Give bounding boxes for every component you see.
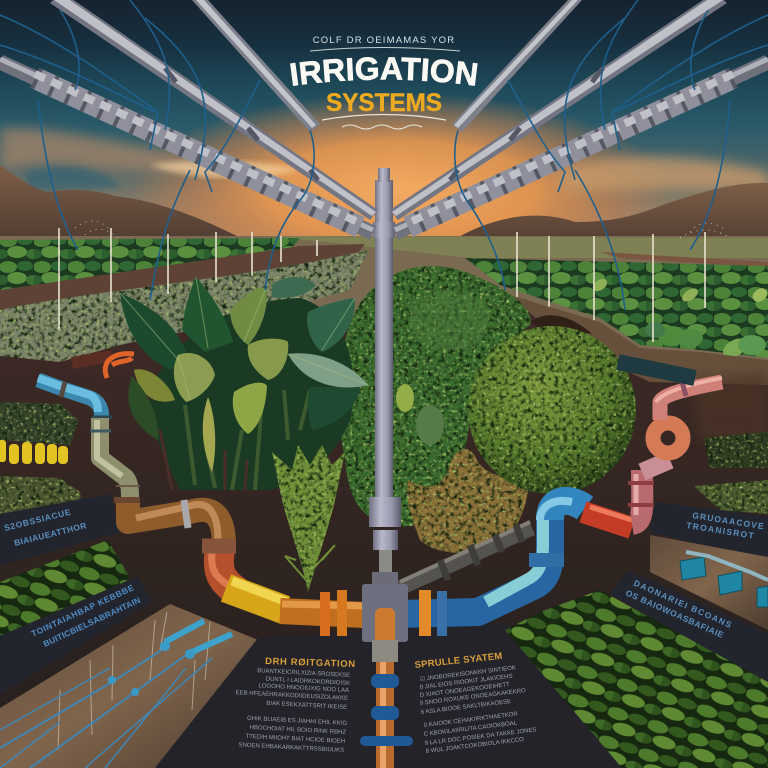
vertical outlet pipe [360, 608, 413, 768]
text block: sprinkler right: 9 SNOO ROXUKE ONOEAGKAKEKRO [420, 688, 526, 707]
title: arched irrigation path [284, 80, 484, 87]
text block: sprinkler right: 6 ASLA BIOOE SAKLTBIKAOESE [421, 699, 512, 716]
stems [185, 390, 310, 490]
panel: right bucket soil patch [650, 535, 768, 630]
mountains right [450, 183, 768, 250]
pipe: top right middle [390, 0, 727, 220]
text block: sprinkler right: 8 WUL JOAKTCOKOBIOLA IKKCCO [426, 737, 525, 755]
field posts [59, 228, 705, 342]
text block: sprinkler right: 8 JIAL EIOS RIOOKIT JLAKICEHS [420, 674, 513, 691]
text block: drip left: BIAK ESEKXATTSRIT IKEISE [266, 701, 347, 711]
title: underline swoosh [322, 114, 446, 120]
right low red shrub [407, 449, 529, 553]
blue hoses [0, 0, 768, 310]
central mixed bush behind pole [339, 266, 531, 526]
pipe: main left coiled [0, 59, 373, 233]
pipe: top right far [452, 0, 582, 132]
pipe: pink with ring [642, 378, 722, 472]
colored pipeline [38, 354, 722, 636]
panel: left leaf crop patch [0, 540, 130, 636]
panel: left text strip 2: TOINTAIAHBAP KEBBBE [30, 582, 136, 639]
sky background [0, 0, 768, 245]
panel: left text strip 1: S2OBSSIACUE [3, 507, 72, 533]
drip lines [0, 648, 212, 768]
right front leaves [591, 276, 768, 361]
panel: bottom right leaf patch [505, 590, 768, 768]
panel: right text strip 1: TROANISROT [686, 520, 755, 541]
text block: drip left: LOOOHO HNOOIUXIG NOO LAA [258, 683, 349, 694]
leaf dark left [120, 293, 187, 370]
pipe: top left middle [50, 0, 378, 220]
pipe: gray valve branch [400, 522, 532, 588]
text block: drip left: GHIK BLIAEIB ES JIAHHI EHIL KKIG [247, 716, 348, 727]
leaf dark lower left [128, 376, 158, 440]
panel: left text strip 2: BUITICBIELSABRAHTAIN [42, 595, 142, 649]
text block: drip left: SNOEN EHBAKARKAKTTRSSBIUUKS [238, 742, 344, 754]
orange valve [105, 354, 134, 378]
title: wave [342, 125, 422, 129]
overhead sprinkler pipes right [390, 0, 768, 233]
text block: drip left [235, 668, 350, 754]
text block: drip left: DUNTL I LAIDRKOKORDIOISK [266, 677, 350, 687]
pipe: dark right segment [618, 362, 695, 378]
pipe: blue red elbow [540, 470, 654, 528]
dark soil base [0, 312, 768, 768]
stems dark [160, 430, 247, 490]
title group [290, 35, 478, 130]
panel: left crop patches [0, 402, 82, 518]
pipe: teal left [38, 378, 112, 420]
bush light leaves [396, 290, 490, 445]
spherical bush [468, 326, 636, 494]
left grass strip [0, 250, 368, 362]
pipe: brown left stub [72, 356, 112, 363]
panel: right text strip 2 [610, 570, 768, 686]
text block: sprinkler right: 9 LA LR DOC POSIEK DA TAKKE JONES [425, 727, 537, 747]
right crop rows [465, 258, 768, 358]
dark mulch mound [530, 315, 592, 334]
leaf pale right [288, 353, 368, 387]
leaf big right [307, 298, 355, 352]
right soil tint [690, 372, 768, 450]
heading: sprinkler system: SPRULLE SYATEM [414, 651, 503, 671]
text block: sprinkler right: 0 KAIOOK CEHAKIIRKTHAETKOR [424, 711, 519, 729]
leaf long narrow [203, 397, 215, 472]
panel: left text strip 2 [0, 576, 152, 694]
left crop rows [0, 238, 300, 292]
crops top left [0, 402, 78, 445]
pipe: blue right [400, 515, 564, 636]
overhead sprinkler pipes left [0, 0, 378, 233]
yellow sprinkler row [0, 440, 68, 464]
panel: right crop patch top [694, 480, 768, 514]
sprinkler spray [75, 221, 730, 238]
tan dirt right [510, 295, 768, 385]
text block: sprinkler right: ☑ JNOBOREKISONKKH SINTIEOK [419, 664, 516, 683]
panel: left text strip 1: BIAIAUEATTHOR [13, 520, 87, 548]
text block: sprinkler right: D XIAOT ONOEAGEKOOEIHETT [420, 682, 510, 699]
panel: right text strip 1 [650, 502, 768, 562]
title: systems: SYSTEMS [326, 89, 442, 117]
fields ground [0, 236, 768, 372]
panel: right text strip 1: GRUOAACOVE [692, 510, 765, 531]
leaf middle [248, 339, 288, 380]
grass plant [272, 445, 345, 592]
pipe: red orange elbow [202, 546, 238, 592]
foliage mass [150, 298, 354, 490]
title: subtitle line: COLF DR OEIMAMAS YOR [313, 35, 455, 46]
pipe: top left far [192, 0, 320, 132]
leaf blue top [272, 277, 316, 298]
text block: drip left: TTEDIH MIIOHT BIAT HCIOE BIOEH [245, 734, 345, 745]
leaf dark tall [182, 277, 233, 352]
pipe: orange [280, 590, 365, 636]
panel: right crop patch small [704, 432, 768, 468]
pipe: main right coiled [395, 59, 768, 233]
pipe: yellow [226, 581, 287, 610]
left dirt path [0, 244, 365, 316]
central pole [362, 168, 408, 642]
title: irrigation: IRRIGATION [290, 57, 478, 86]
text block: drip left: EEB HFEAEHRAKKODIIDEUSIZOLAKKE [235, 690, 348, 702]
mountains left [0, 165, 245, 246]
pipe: green elbow [90, 418, 140, 498]
title: arc line top [310, 48, 460, 51]
leaf lime center [233, 383, 267, 434]
pipe: copper elbow [114, 497, 224, 545]
text block: drip left: HBOCHOIAT HIL BOIO RINK RBHZ [249, 725, 347, 736]
panel: drip irrigation soil patch [0, 604, 258, 768]
panel: right text strip 2: OS BAIOWOASBAFIAIE [624, 588, 725, 640]
leaf yellow left [134, 369, 175, 402]
text block: drip left: BUANTKEICRILXIZIA SROSEKSE [257, 668, 350, 679]
buckets [680, 557, 768, 607]
leaf mid right dark [308, 387, 360, 430]
panel: bottom center text panel [155, 622, 622, 768]
heading: drip irrigation: DRH RØITGATION [265, 656, 355, 670]
panel: right text strip 2: DAONARIEI BCOANS [632, 578, 733, 630]
text block: sprinkler right [419, 664, 537, 755]
leaf ribs [120, 277, 368, 400]
leaf pale round [174, 353, 215, 402]
text block: sprinkler right: C KBOKILAIIRILITA CAOIOKBOAL [424, 721, 518, 738]
panel: left text strip 1 [0, 494, 120, 566]
tropical plant [120, 277, 368, 490]
leaf yellow-green top [230, 288, 267, 345]
